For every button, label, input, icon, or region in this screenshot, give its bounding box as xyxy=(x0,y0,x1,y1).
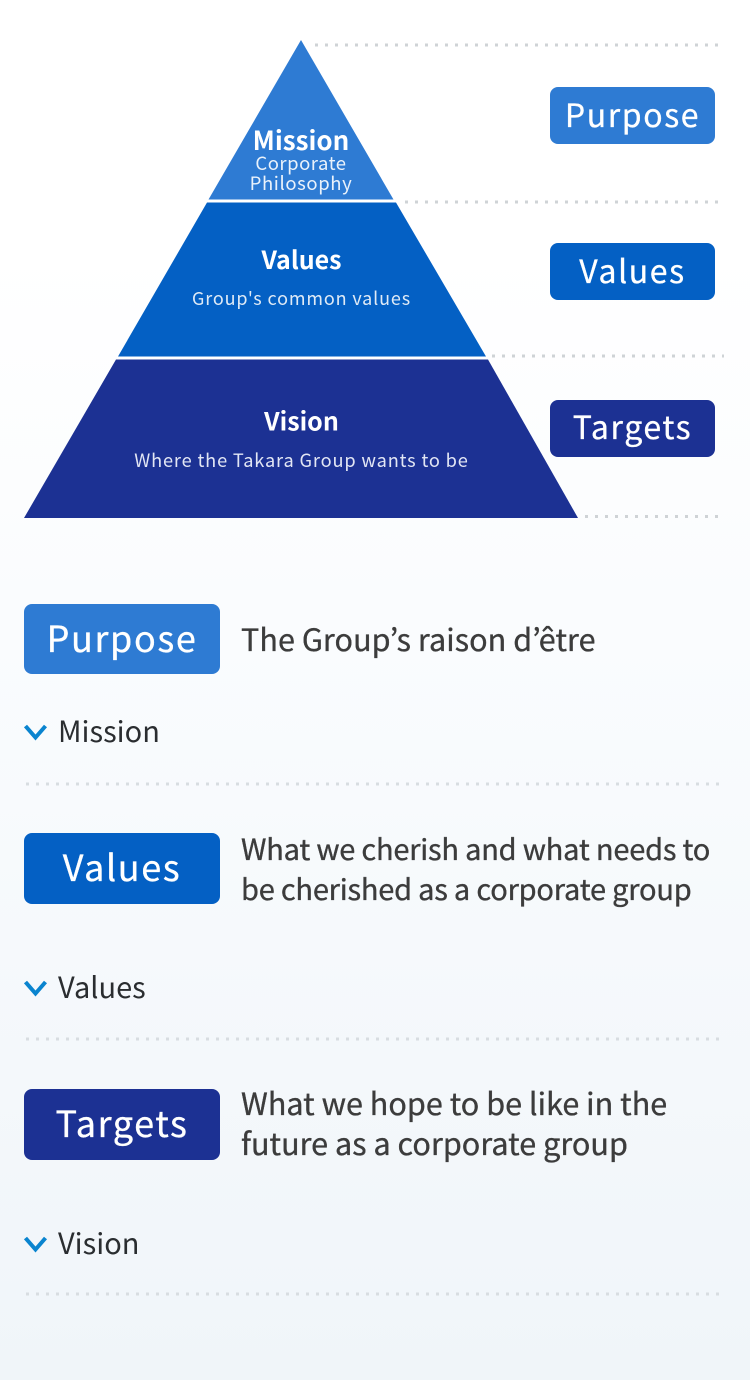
description: Targets: What we hope to be like in the xyxy=(241,1080,667,1124)
tier: Values: Group's common values xyxy=(192,285,411,311)
tag: Purpose xyxy=(550,87,715,144)
link: Vision: Vision xyxy=(58,1221,139,1263)
link: Mission: Mission xyxy=(58,709,160,751)
tag: Targets: Targets xyxy=(573,403,692,449)
leader lines xyxy=(315,45,724,516)
tier: Mission: Philosophy xyxy=(250,170,352,196)
tier: Vision: Where the Takara Group wants to be xyxy=(134,447,469,473)
tier: Values: Values xyxy=(260,241,342,277)
badge: Values xyxy=(24,833,220,904)
pyramid diagram xyxy=(24,40,724,518)
tier: Mission: Mission xyxy=(253,121,349,158)
tag: Values: Values xyxy=(579,247,686,293)
badge: Purpose xyxy=(24,604,220,674)
tier: Vision xyxy=(24,360,578,518)
badge: Targets xyxy=(24,1089,220,1160)
description: Values xyxy=(241,827,710,909)
tier: Vision: Vision xyxy=(263,402,339,438)
description: Values: be cherished as a corporate group xyxy=(241,867,692,909)
tag: Values xyxy=(550,243,715,300)
description: Purpose: The Group’s raison d’être xyxy=(241,616,596,660)
tier: Values xyxy=(118,202,486,356)
link: Values: Values xyxy=(58,965,146,1007)
description: Targets xyxy=(241,1080,667,1164)
badge: Purpose: Purpose xyxy=(47,611,197,663)
description: Targets: future as a corporate group xyxy=(241,1120,628,1164)
tier: Mission xyxy=(208,40,394,200)
badge: Targets: Targets xyxy=(55,1096,189,1148)
tag: Purpose: Purpose xyxy=(565,91,700,137)
badge: Values: Values xyxy=(63,840,181,892)
tag: Targets xyxy=(550,400,715,457)
description: Values: What we cherish and what needs to xyxy=(241,827,710,869)
tier: Mission: Corporate xyxy=(255,150,347,176)
